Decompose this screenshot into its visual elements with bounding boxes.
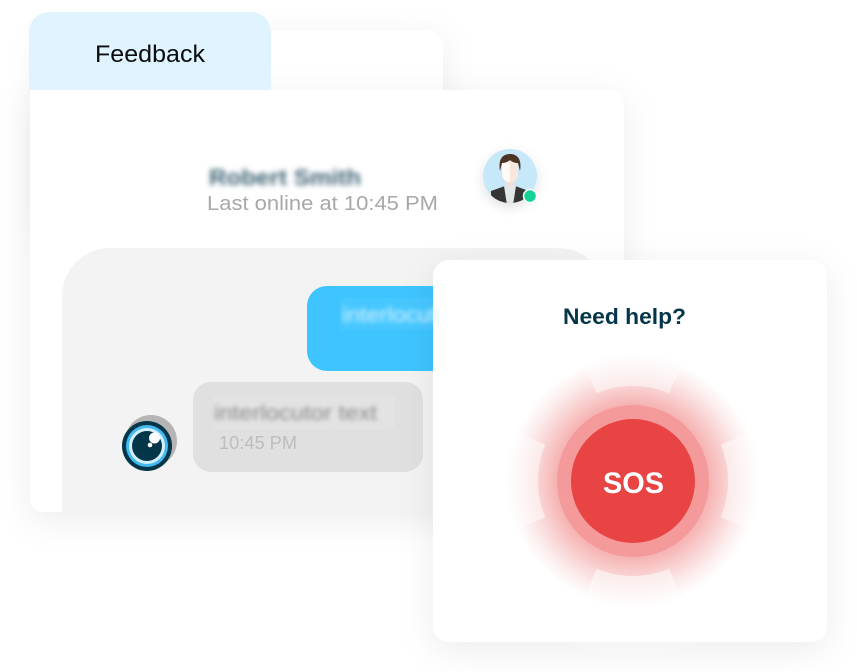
contact name (blurred): Robert Smith <box>209 165 361 190</box>
back card <box>40 30 443 230</box>
last online status: Last online at 10:45 PM <box>207 193 438 215</box>
heading: Need help?: Need help? <box>563 304 686 329</box>
received message bubble <box>193 382 423 472</box>
SOS button with glow <box>502 350 764 612</box>
chat area <box>62 248 606 512</box>
online indicator <box>524 190 536 202</box>
main chat card <box>30 90 624 512</box>
faint shape under SOS card <box>565 642 700 654</box>
received message bubble: 10:45 PM <box>219 433 297 453</box>
tab: Feedback: Feedback <box>95 41 206 68</box>
sent message bubble <box>307 286 450 371</box>
SOS card <box>433 260 827 642</box>
icon: eye avatar <box>122 415 177 471</box>
sent message text (blurred): interlocutor text <box>342 304 502 327</box>
tab: Feedback <box>29 12 271 90</box>
contact avatar <box>483 149 537 205</box>
received message bubble: interlocutor text <box>214 402 377 425</box>
SOS button with glow: SOS <box>603 467 664 500</box>
